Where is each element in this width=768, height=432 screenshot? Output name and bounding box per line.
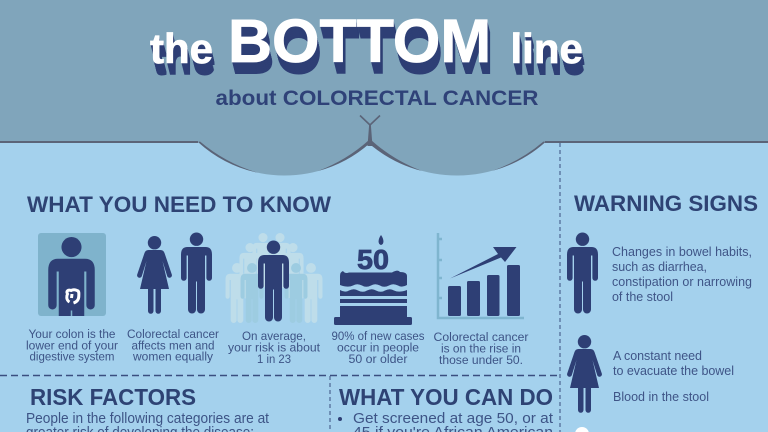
- caption: rise under 50: is on the rise in: [441, 342, 521, 356]
- caption: men and women: affects men and: [132, 338, 215, 352]
- bullet: [338, 417, 342, 421]
- caption: colon: lower end of your: [26, 338, 118, 352]
- caption: average risk: your risk is about: [228, 340, 321, 354]
- icon: next figure head: [575, 427, 589, 432]
- text: bowel habit changes: constipation or narrowing: [612, 275, 752, 289]
- panel: what you need to know: [26, 192, 528, 367]
- title: line: [510, 24, 583, 72]
- caption: men and women: Colorectal cancer: [127, 327, 219, 341]
- chart: rising bars with arrow: [438, 233, 524, 318]
- text: bowel habit changes: of the stool: [612, 290, 673, 304]
- caption: average risk: On average,: [242, 329, 306, 343]
- heading: warning signs: WARNING SIGNS: [574, 191, 758, 216]
- title: BOTTOM: [228, 7, 491, 75]
- caption: rise under 50: Colorectal cancer: [434, 330, 528, 344]
- heading: risk factors: RISK FACTORS: [30, 384, 196, 410]
- text: blood in stool: Blood in the stool: [613, 390, 709, 404]
- caption: colon: Your colon is the: [28, 327, 116, 341]
- title: the: [150, 24, 213, 72]
- caption: age 50: 50 or older: [348, 352, 408, 366]
- header banner: [0, 0, 768, 176]
- title: [150, 7, 584, 76]
- text: bowel habit changes: such as diarrhea,: [612, 260, 707, 274]
- text: risk factors intro: People in the following categories are at: [26, 411, 269, 427]
- icon: woman and man: [137, 232, 212, 314]
- section dividers: [0, 143, 560, 432]
- icon: birthday cake with 50: 50: [357, 244, 389, 275]
- icon: crowd with one highlighted person: [226, 233, 322, 323]
- heading: what you need to know: WHAT YOU NEED TO KNOW: [27, 192, 332, 217]
- icon: man: [567, 232, 598, 314]
- icon: birthday cake with 50: [334, 235, 412, 325]
- caption: average risk: 1 in 23: [257, 352, 291, 366]
- icon: bottom cleft mark: [360, 116, 380, 146]
- icon: woman: [567, 335, 602, 413]
- text: screening advice: Get screened at age 50, or at: [353, 411, 553, 427]
- caption: age 50: 90% of new cases: [332, 329, 424, 343]
- text: constant need: A constant need: [613, 349, 702, 363]
- panel: what you can do: [338, 384, 553, 432]
- subtitle: about COLORECTAL CANCER: [216, 87, 538, 110]
- text: bowel habit changes: Changes in bowel habits,: [612, 245, 752, 259]
- panel: risk factors: [26, 384, 269, 432]
- caption: colon: digestive system: [30, 350, 114, 364]
- panel: warning signs: [567, 191, 758, 432]
- caption: age 50: occur in people: [337, 340, 419, 354]
- caption: men and women: women equally: [132, 350, 214, 364]
- icon: person with colon: [38, 233, 106, 316]
- heading: what you can do: WHAT YOU CAN DO: [339, 384, 553, 410]
- text: constant need: to evacuate the bowel: [613, 364, 734, 378]
- caption: rise under 50: those under 50.: [439, 353, 523, 367]
